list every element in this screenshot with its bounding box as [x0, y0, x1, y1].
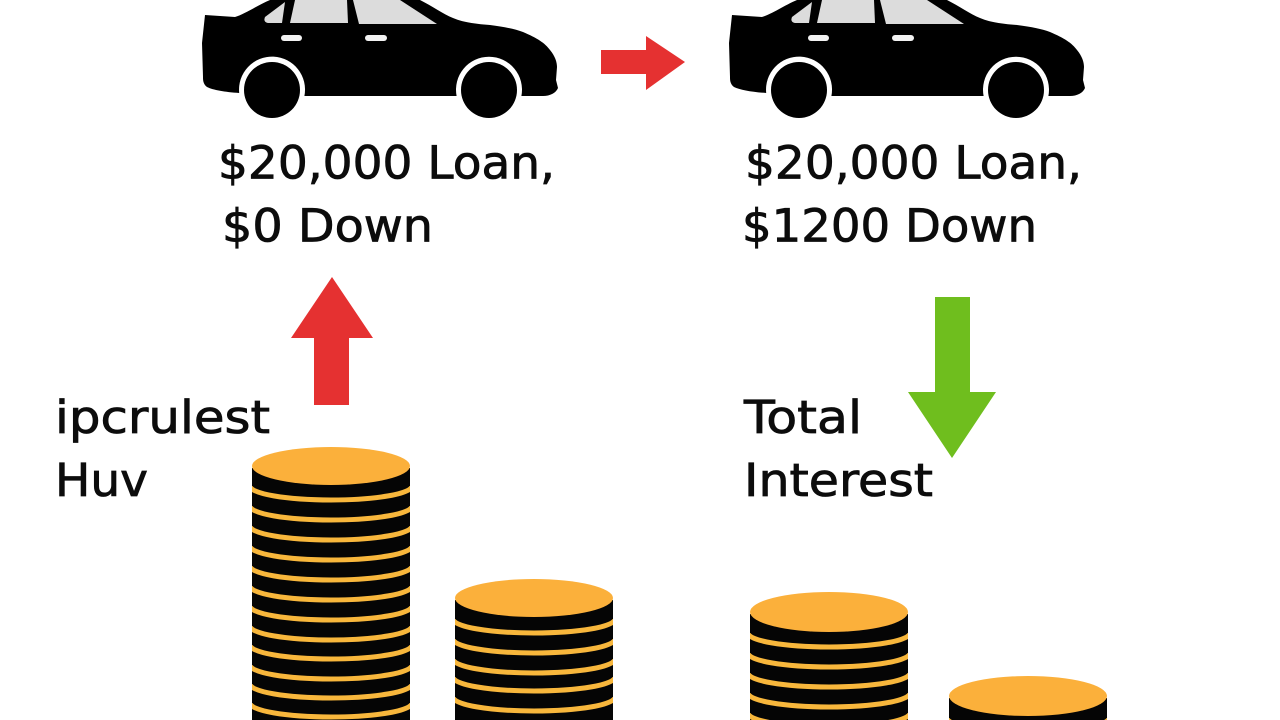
text: right interest label: Total [743, 391, 862, 444]
text: right loan label [742, 136, 1082, 252]
text: left loan label: $0 Down [222, 200, 433, 252]
text: right interest label: Interest [744, 454, 933, 507]
arrow: red up arrow [291, 277, 373, 405]
coin stack: short, right pair [947, 676, 1109, 720]
text: right loan label: $1200 Down [742, 200, 1037, 252]
text: left loan label: $20,000 Loan, [218, 136, 555, 190]
icon: car, $1200 down [729, 0, 1085, 118]
icon: car, $0 down [202, 0, 558, 118]
coin stack: tall, right pair [748, 592, 910, 720]
text: left interest label [55, 391, 270, 507]
text: left interest label: ipcrulest [55, 391, 270, 444]
arrow: red right arrow between cars [601, 36, 685, 90]
arrow: green down arrow [908, 297, 996, 458]
text: right loan label: $20,000 Loan, [745, 136, 1082, 190]
coin stack: tall, left pair [250, 447, 412, 720]
coin stack: short, left pair [453, 579, 615, 720]
text: left loan label [218, 136, 555, 252]
text: right interest label [743, 391, 933, 507]
text: left interest label: Huv [55, 454, 148, 507]
